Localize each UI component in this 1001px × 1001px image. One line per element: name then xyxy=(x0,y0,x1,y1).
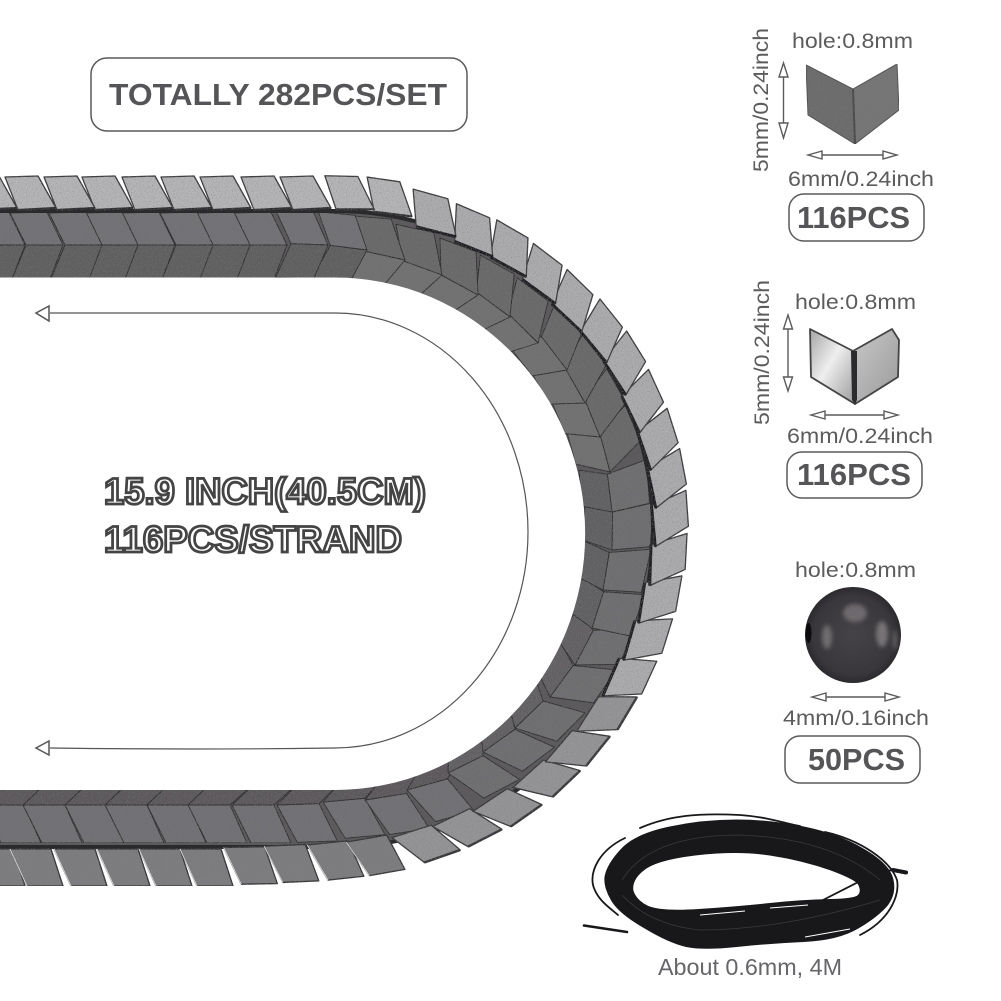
hole size: hole:0.8mm xyxy=(792,29,913,53)
quantity badge xyxy=(785,736,920,783)
width label: 6mm/0.24inch xyxy=(788,167,934,191)
width arrow xyxy=(808,151,897,159)
strand length text xyxy=(104,471,426,560)
height label: 5mm/0.24inch xyxy=(750,280,774,425)
height arrow xyxy=(784,315,792,391)
panel: glossy chevron bead xyxy=(750,280,933,498)
quantity badge: 116PCS xyxy=(797,457,911,492)
bead strand xyxy=(0,175,689,886)
outer row of flat beads xyxy=(0,175,689,886)
icon: cord coil xyxy=(584,814,906,947)
panel: round bead xyxy=(783,558,929,783)
strand length text: 15.9 INCH(40.5CM) xyxy=(104,471,426,512)
title badge: TOTALLY 282PCS/SET xyxy=(109,77,447,112)
inner row of chevron beads xyxy=(0,209,653,843)
height label: 5mm/0.24inch xyxy=(749,28,773,172)
icon: round bead xyxy=(805,587,901,683)
quantity badge xyxy=(789,194,924,241)
width arrow xyxy=(812,693,899,701)
width label: 6mm/0.24inch xyxy=(787,424,933,448)
panel: black cord xyxy=(584,814,906,980)
clean inner edge of strand xyxy=(0,278,585,790)
icon: matte chevron bead xyxy=(806,64,899,144)
quantity badge xyxy=(787,452,922,498)
panel: matte chevron bead xyxy=(749,28,934,241)
length arrow around strand xyxy=(36,306,528,755)
icon: glossy chevron bead xyxy=(810,329,899,404)
cord label: About 0.6mm, 4M xyxy=(658,954,842,980)
height arrow xyxy=(779,63,788,138)
hole size: hole:0.8mm xyxy=(795,290,916,314)
band behind chevrons xyxy=(0,211,653,847)
quantity badge: 50PCS xyxy=(808,742,905,777)
hole size: hole:0.8mm xyxy=(795,558,916,582)
quantity badge: 116PCS xyxy=(797,200,910,235)
title badge xyxy=(91,58,467,131)
strand length text: 116PCS/STRAND xyxy=(104,519,402,560)
width arrow xyxy=(811,411,898,419)
width label: 4mm/0.16inch xyxy=(783,706,929,730)
